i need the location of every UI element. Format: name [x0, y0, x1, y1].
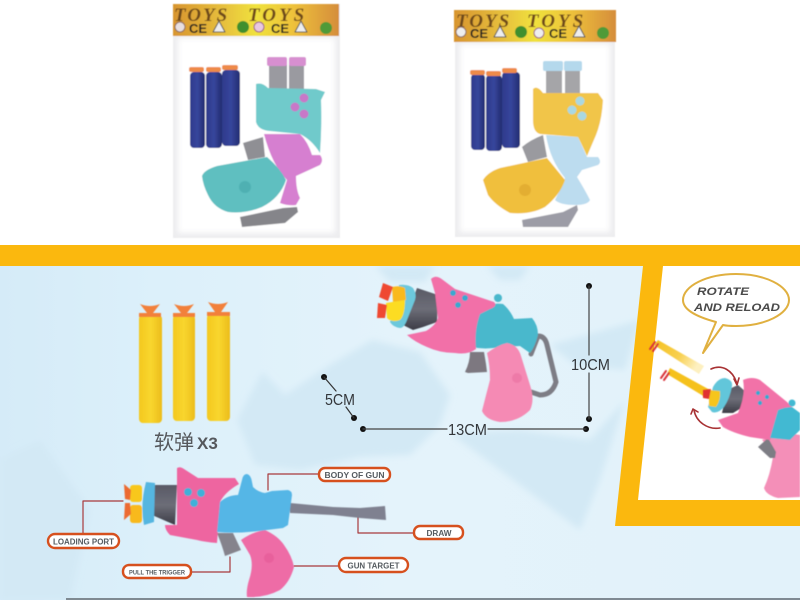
- dimension: 13CM: 13CM: [448, 422, 487, 439]
- callout: pull the trigger: PULL THE TRIGGER: [129, 570, 185, 576]
- header card: [173, 4, 339, 36]
- toy gun with dimensions: [321, 277, 610, 439]
- orange top band: [0, 245, 800, 266]
- loaded dart: [661, 368, 710, 397]
- white inset: [638, 266, 800, 500]
- navy foam darts: [189, 65, 240, 148]
- speech bubble: AND RELOAD: [693, 302, 780, 314]
- dimension: 10CM: 10CM: [571, 357, 610, 374]
- callout: gun target: GUN TARGET: [348, 560, 400, 570]
- header card: TOYS: [174, 5, 229, 26]
- panel: lower blue section with map background: [0, 266, 800, 600]
- callout: loading port: LOADING PORT: [53, 536, 115, 546]
- dart count label: 软弹X3: [154, 431, 218, 454]
- callout: loading port: [48, 534, 119, 548]
- header card: [454, 10, 616, 42]
- callout: pull the trigger: [123, 565, 191, 578]
- moving dart: [650, 340, 704, 374]
- toy gun: [202, 57, 325, 227]
- dimension: 13CM: [360, 422, 589, 439]
- speech bubble: ROTATE: [697, 286, 750, 298]
- callout: body of gun: BODY OF GUN: [324, 470, 384, 480]
- header card: CE: [189, 21, 207, 36]
- yellow frame: [615, 266, 800, 526]
- header card: TOYS: [248, 5, 307, 26]
- gun, side view: [124, 467, 386, 597]
- panel: rotate and reload: [615, 266, 800, 526]
- dimension: 5CM: 5CM: [325, 392, 355, 409]
- gun, upper view: [377, 277, 556, 422]
- header card: TOYS: [527, 11, 586, 32]
- bottom edge: [66, 598, 800, 600]
- rotate arrows: [691, 367, 739, 428]
- panel: packaged toy, blue and yellow: [454, 10, 616, 237]
- header card: CE: [470, 26, 488, 41]
- toy gun cutaway: [703, 378, 800, 498]
- dimension: 5CM: [321, 374, 357, 421]
- labelled toy gun diagram: [48, 467, 463, 597]
- navy foam darts: [470, 68, 520, 151]
- header card: CE: [271, 21, 289, 36]
- plastic bag: [455, 10, 615, 237]
- callout: body of gun: [319, 468, 390, 481]
- callout: gun target: [339, 558, 408, 572]
- speech bubble: [683, 274, 789, 353]
- header card: TOYS: [456, 11, 511, 32]
- yellow foam darts with suction cups: [139, 302, 230, 423]
- world map silhouette: [0, 266, 640, 600]
- dimension: 10CM: [571, 283, 610, 422]
- callout: draw: DRAW: [426, 529, 452, 538]
- panel: packaged toy, pink and teal: [173, 4, 340, 238]
- callout leader lines: [83, 474, 413, 572]
- header card: CE: [549, 26, 567, 41]
- callout: draw: [414, 526, 463, 539]
- plastic bag: [173, 4, 340, 238]
- toy gun: [483, 61, 603, 227]
